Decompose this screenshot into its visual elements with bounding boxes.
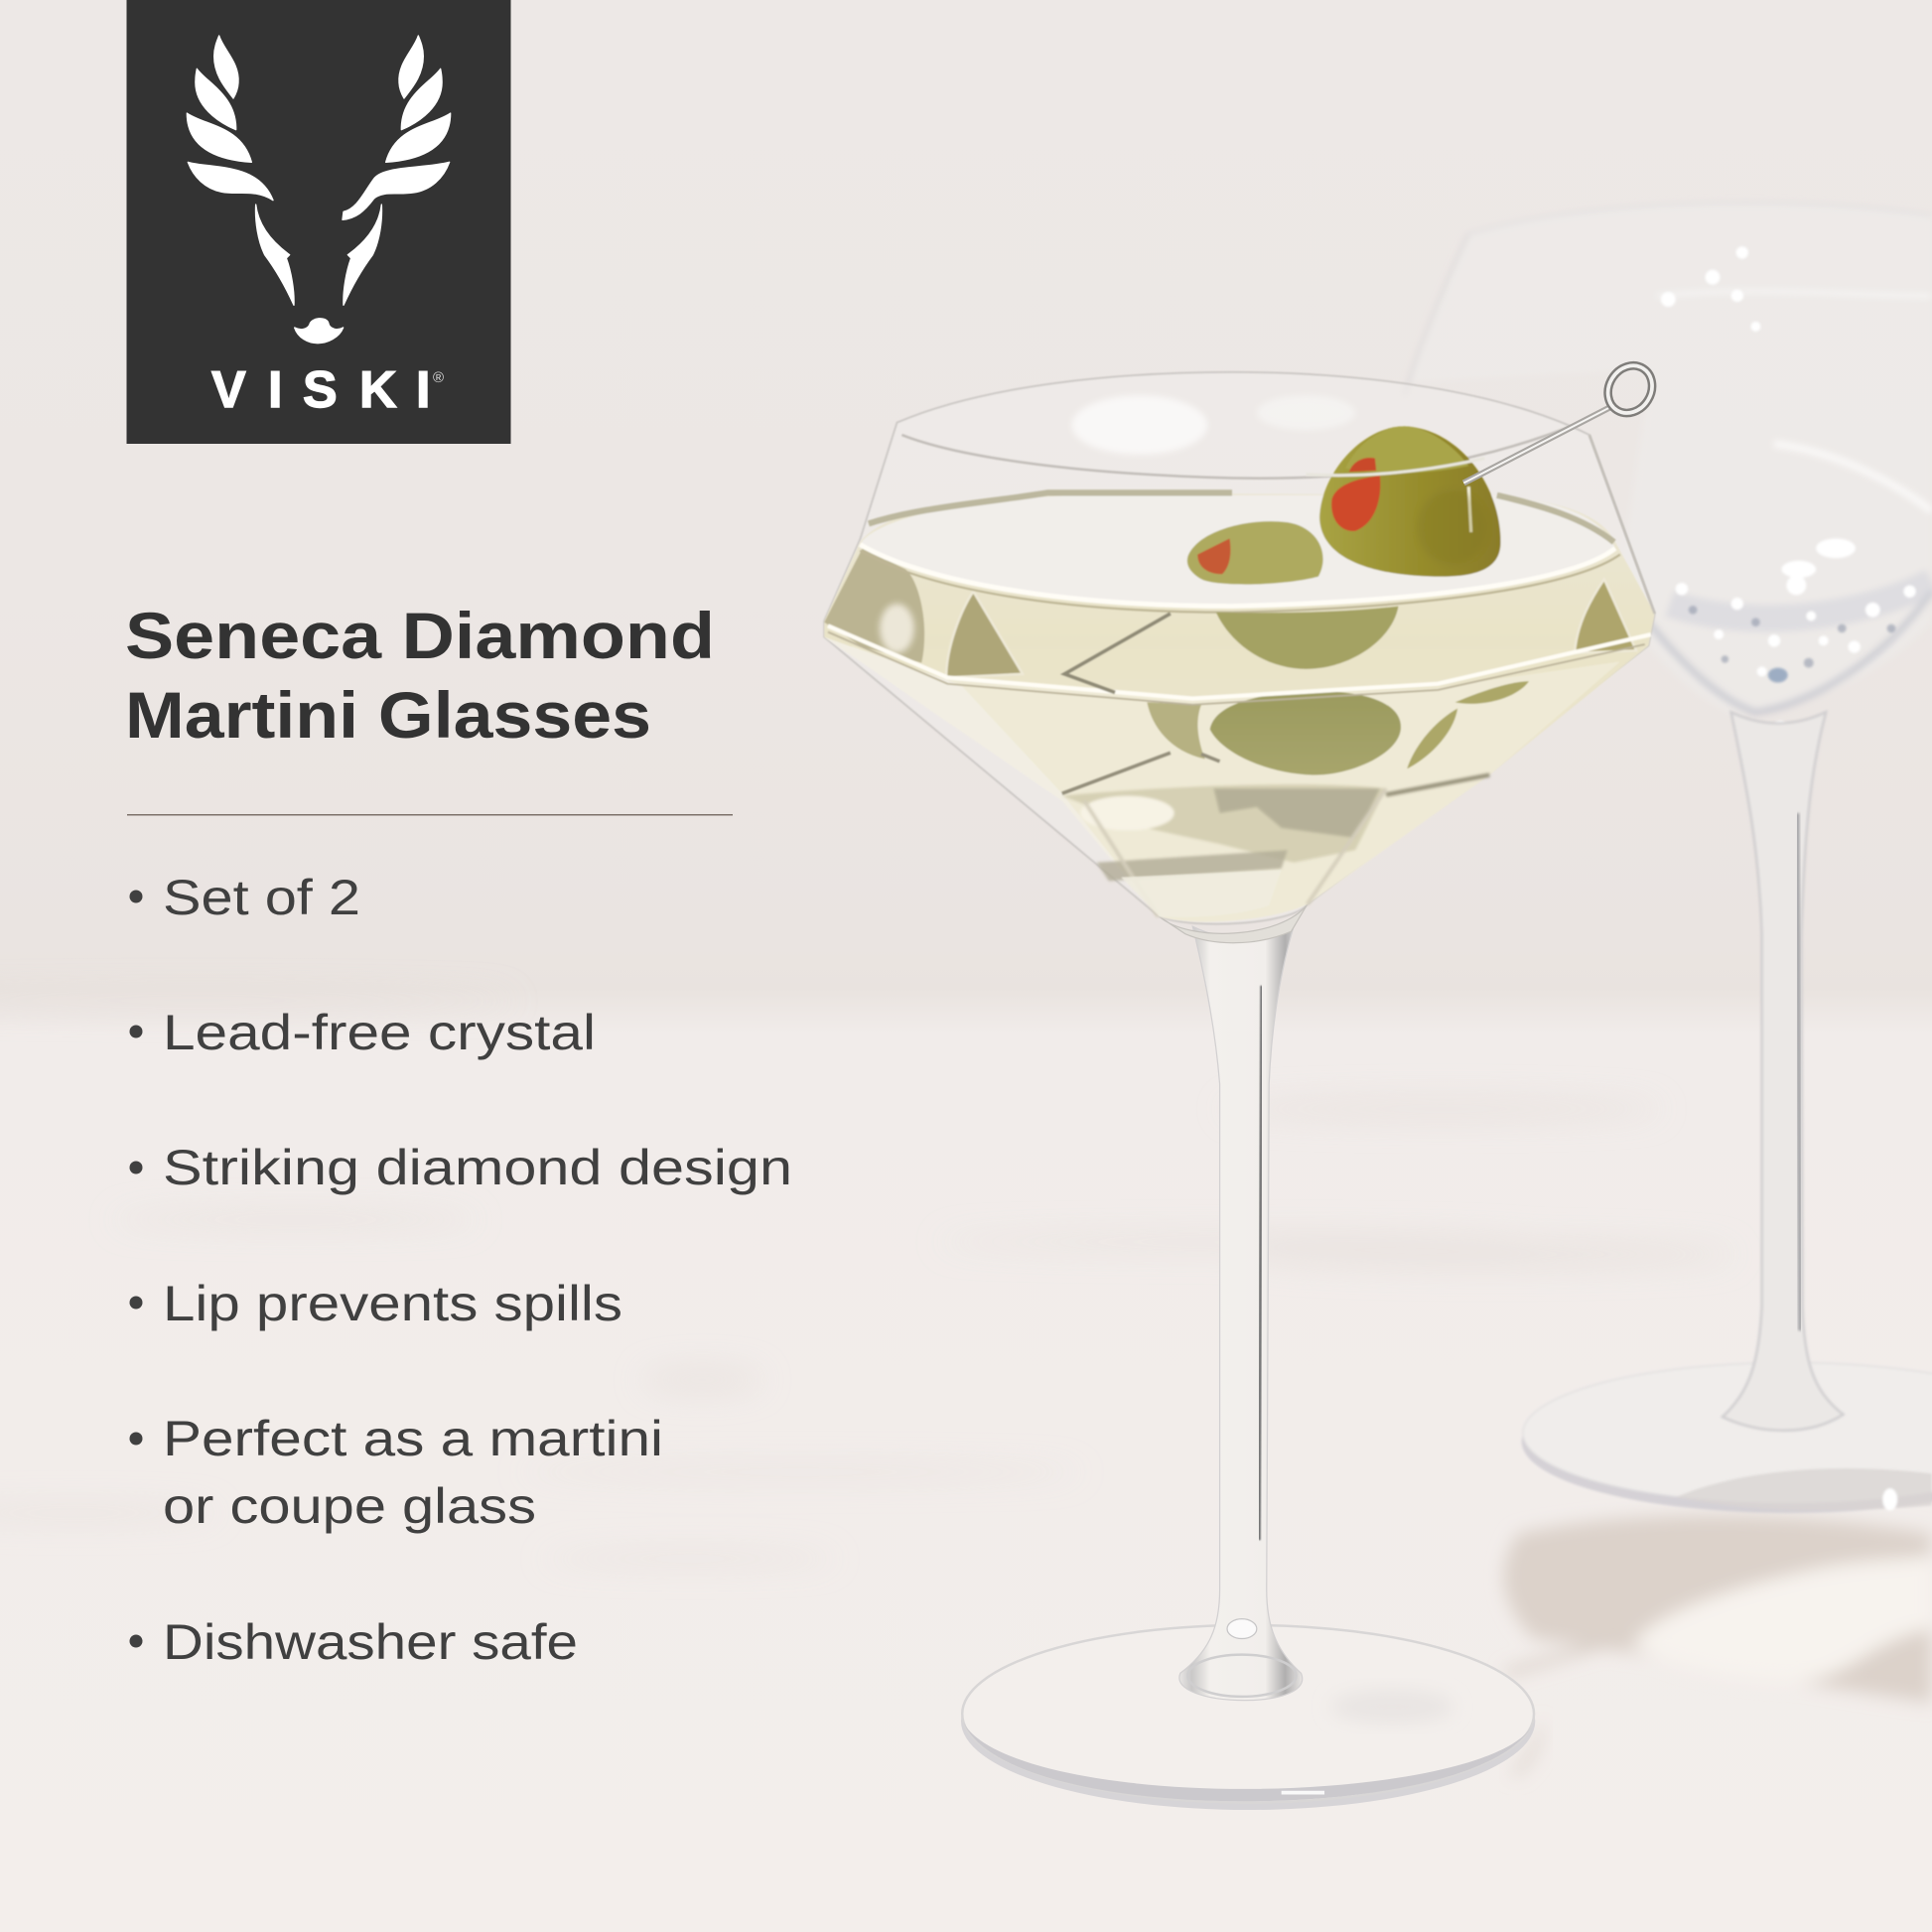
marble streaks on table [0,993,1737,1565]
bottom pale glass [1121,870,1282,917]
liquid surface, above waterline [860,495,1615,607]
stem dark edge line [1259,986,1262,1540]
logo stag mark [187,36,451,344]
diagonal reflection upper [1064,614,1171,692]
right olive slivers [1407,681,1529,768]
feature: striking diamond design: Striking diamond design [163,1140,792,1195]
registered mark: ® [433,369,444,386]
glass foot [961,1625,1535,1810]
cocktail pick [1463,357,1661,483]
lower pale zone [852,645,1620,921]
left facet tan [824,548,924,663]
front martini glass [824,357,1661,1810]
divider [127,814,733,816]
rear glass foot [1522,1363,1932,1513]
diagonal reflection lower [1062,753,1220,793]
top olive [1306,426,1501,577]
title: Seneca Diamond [125,599,715,672]
lower submerged olive [1210,691,1401,775]
feature: lead-free crystal: Lead-free crystal [163,1005,596,1060]
small submerged olive [1147,702,1205,759]
foot shadow [1509,1719,1543,1777]
outer wedge of pale glass [824,637,1160,916]
stem base bubble [1187,1619,1297,1697]
feature: martini or coupe: Perfect as a martini [163,1411,663,1466]
waterline tan arc [860,551,1620,613]
liquid waterline arc [860,545,1615,607]
feature: dishwasher safe: Dishwasher safe [163,1614,578,1670]
title: Martini Glasses [125,678,651,752]
feature: martini or coupe [129,1411,663,1534]
rear glass dark sparkles [1689,606,1895,683]
title [125,599,715,752]
pick ring [1599,357,1661,421]
rear glass sparkles [1661,246,1916,733]
feature: set of 2: Set of 2 [163,870,360,925]
rear glass bowl [1405,203,1932,715]
glass stem [1179,926,1303,1701]
top olive highlight [1468,486,1471,532]
reflected olive [1216,607,1399,669]
rear glass stem dark line [1798,813,1800,1330]
logo wordmark: VISKI [211,361,430,419]
top olive shade [1417,490,1486,564]
rim front arc [901,419,1589,479]
facet band tan [828,632,1645,705]
triangle facet right [1575,579,1636,653]
facet band white [828,625,1651,699]
liquid group [824,426,1655,921]
glass collar [1160,904,1308,943]
rear surface silver band [869,492,1614,542]
triangle facet left [946,592,1023,678]
feature: lip prevents spills: Lip prevents spills [163,1276,622,1331]
shadow of rear glass on table [1504,1515,1932,1703]
feature list [129,870,792,1670]
right glass wall light [1589,435,1655,614]
left facet highlight [880,604,914,653]
second olive above liquid [1187,521,1323,585]
bottom reflections [1062,775,1489,916]
rear glass [1405,203,1932,1513]
top olive pimento upper [1349,458,1376,472]
feature: martini or coupe: or coupe glass [163,1478,536,1534]
rim rear highlights [1072,395,1355,455]
top olive pimento [1331,476,1380,531]
second olive pimento [1197,538,1230,574]
Viski logo panel [127,0,510,444]
martini liquid [824,492,1655,921]
rear glass stem [1723,712,1844,1431]
top olive upper dome [1345,426,1468,473]
front rim over olive [1306,459,1484,476]
bowl glass [824,372,1655,924]
